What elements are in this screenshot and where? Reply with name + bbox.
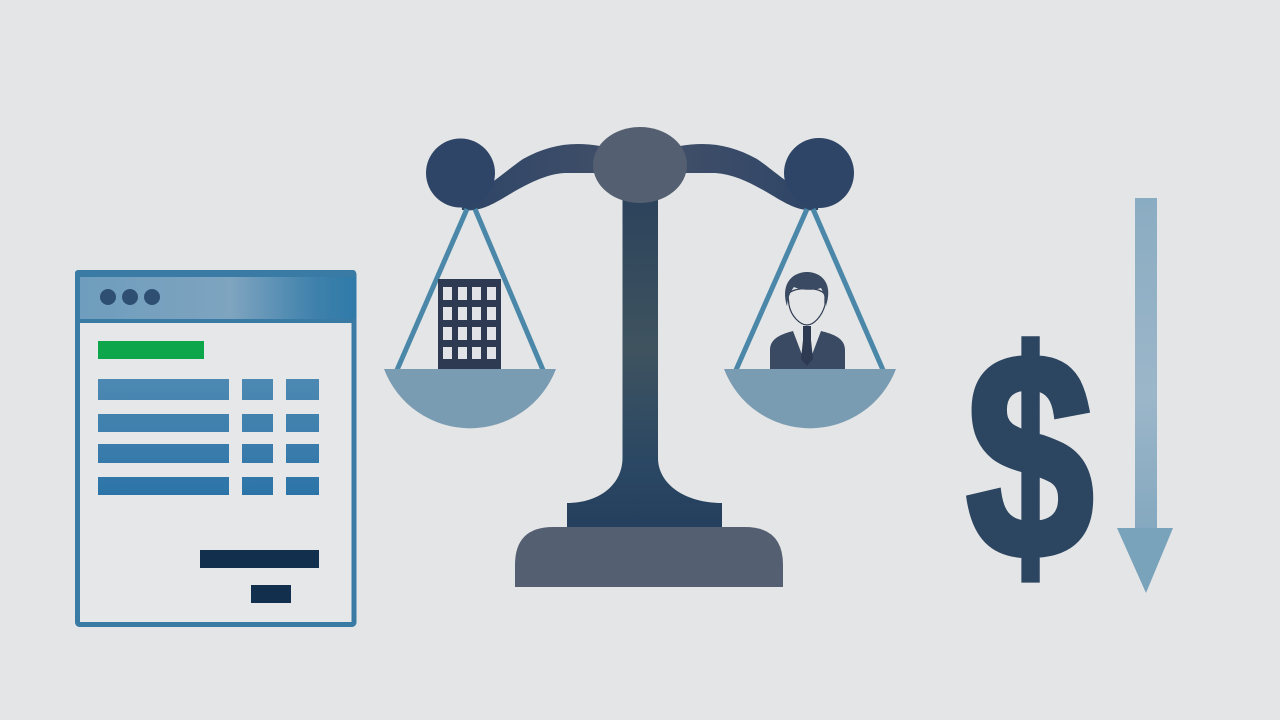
balance scale — [384, 127, 896, 587]
hair — [785, 272, 828, 306]
green heading bar — [98, 341, 204, 359]
small total bar — [251, 585, 291, 603]
right pan strings — [736, 209, 883, 370]
icon: businessman — [770, 272, 845, 369]
window control dots — [100, 289, 160, 305]
beam pivot — [593, 127, 687, 203]
left beam ball — [426, 138, 495, 208]
face — [788, 288, 825, 325]
scale base — [515, 527, 783, 587]
total bar — [200, 550, 319, 568]
tie — [801, 326, 813, 366]
dollar sign: $ — [967, 294, 1093, 619]
body — [770, 331, 845, 369]
table rows — [98, 379, 319, 495]
right pan — [724, 369, 896, 428]
arrow: falling value — [1117, 198, 1173, 593]
right beam arm — [680, 144, 820, 210]
window title bar — [75, 270, 356, 323]
window frame — [78, 272, 354, 624]
left pan — [384, 369, 556, 428]
panel: invoice window — [75, 270, 356, 624]
right beam ball — [784, 138, 854, 208]
left beam arm — [460, 144, 600, 210]
icon: office building — [438, 279, 501, 369]
scale column — [567, 195, 722, 527]
left pan strings — [397, 209, 543, 370]
